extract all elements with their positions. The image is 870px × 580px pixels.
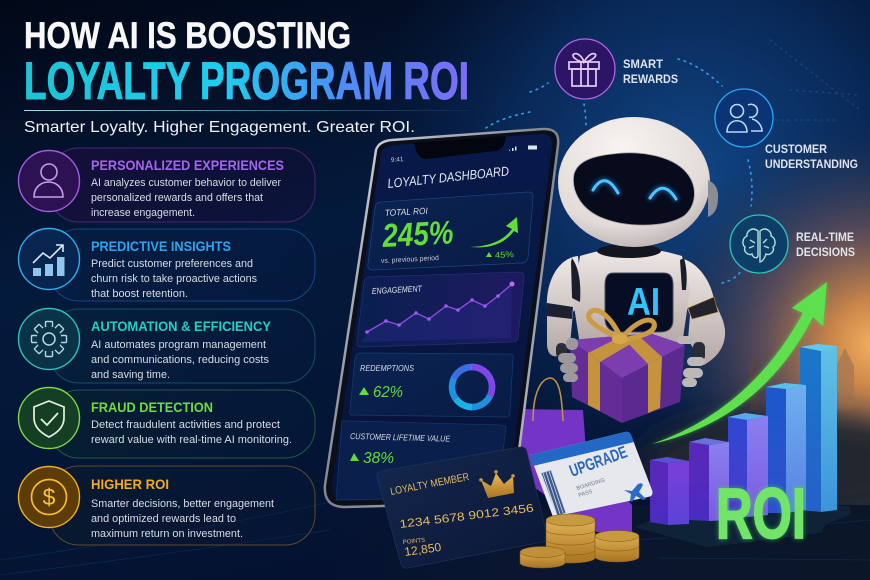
label: real-time decisions: REAL-TIME xyxy=(796,232,854,244)
boarding pass: UPGRADE xyxy=(567,442,630,481)
status icons xyxy=(509,146,537,151)
robot arms xyxy=(547,256,582,356)
label: smart rewards xyxy=(623,59,678,86)
robot hands xyxy=(556,336,705,387)
robot xyxy=(547,117,725,365)
title xyxy=(24,15,469,111)
card: total ROI: TOTAL ROI xyxy=(385,206,429,218)
card: total ROI: 245% xyxy=(381,213,454,254)
bar 1 xyxy=(650,457,689,525)
panel: predictive insights: churn risk to take proactive actions xyxy=(91,273,257,285)
panel: automation and efficiency: and communications, reducing costs xyxy=(91,354,269,366)
bar chart xyxy=(633,344,851,548)
card: redemptions: REDEMPTIONS xyxy=(360,363,414,373)
panel: predictive insights xyxy=(18,228,315,301)
shopping bag xyxy=(497,378,632,532)
subtitle: Smarter Loyalty. Higher Engagement. Greater ROI. xyxy=(24,119,415,136)
title: LOYALTY PROGRAM ROI xyxy=(24,52,469,111)
panel: personalized experiences: increase engagement. xyxy=(91,207,195,219)
icon: person xyxy=(18,150,80,212)
notch xyxy=(414,136,506,159)
bar 5 xyxy=(800,344,837,512)
panel: fraud detection: Detect fraudulent activities and protect xyxy=(91,419,280,431)
card: engagement chart xyxy=(357,272,524,347)
barcode xyxy=(541,470,566,516)
label: smart rewards: REWARDS xyxy=(623,74,678,86)
card: engagement chart: ENGAGEMENT xyxy=(372,283,423,296)
donut chart xyxy=(452,367,492,407)
card: redemptions: 62% xyxy=(373,384,403,401)
label: smart rewards: SMART xyxy=(623,59,663,71)
icon: rising chart xyxy=(18,228,80,290)
label: customer understanding: UNDERSTANDING xyxy=(765,159,858,171)
label: customer understanding: CUSTOMER xyxy=(765,144,828,156)
loyalty card xyxy=(377,447,547,568)
panel: personalized experiences: personalized rewards and offers that xyxy=(91,192,263,204)
bar 2 xyxy=(689,438,729,521)
robot torso xyxy=(573,248,690,345)
boarding pass: PASS xyxy=(578,489,594,499)
panel: automation and efficiency: AUTOMATION & EFFICIENCY xyxy=(91,318,272,334)
robot neck xyxy=(597,244,661,258)
phone xyxy=(325,129,558,507)
icon: customer understanding xyxy=(715,89,773,147)
label: customer understanding xyxy=(765,144,858,171)
ROI letters: ROI xyxy=(716,475,806,554)
icon: dollar coin xyxy=(18,466,80,528)
network dotted links xyxy=(486,40,860,283)
panel: automation and efficiency xyxy=(18,308,315,383)
card: total ROI xyxy=(368,192,533,270)
panel: higher ROI: Smarter decisions, better engagement xyxy=(91,498,274,510)
robot visor xyxy=(573,153,694,225)
icon: real-time decisions brain xyxy=(730,215,788,273)
clock: 9:41 xyxy=(391,156,404,164)
robot chest screen: AI xyxy=(627,281,660,324)
gift box xyxy=(570,310,685,423)
panel: fraud detection xyxy=(18,388,315,458)
boarding pass: BOARDING xyxy=(576,478,606,492)
icon: dollar coin: $ xyxy=(43,484,56,510)
panel: higher ROI: maximum return on investment. xyxy=(91,528,243,540)
panel: personalized experiences xyxy=(18,148,315,222)
loyalty card: 12,850 xyxy=(403,540,442,559)
label: real-time decisions: DECISIONS xyxy=(796,247,855,259)
panel: fraud detection: reward value with real-time AI monitoring. xyxy=(91,434,292,446)
robot ear xyxy=(708,180,718,217)
arrow: growth xyxy=(652,282,827,444)
loyalty card: POINTS xyxy=(403,538,425,546)
panel: higher ROI xyxy=(18,466,315,545)
bar 3 xyxy=(728,413,768,517)
icon: gear xyxy=(18,308,80,370)
card: customer lifetime value: CUSTOMER LIFETIME VALUE xyxy=(350,431,450,444)
icon: plane xyxy=(624,483,646,502)
card: total ROI: vs. previous period xyxy=(381,255,439,265)
panel: automation and efficiency: and saving time. xyxy=(91,369,170,381)
card: customer lifetime value xyxy=(336,421,506,500)
label: real-time decisions xyxy=(796,232,855,259)
card: redemptions xyxy=(350,353,513,417)
panel: higher ROI: and optimized rewards lead to xyxy=(91,513,236,525)
card: customer lifetime value: 38% xyxy=(363,450,394,467)
loyalty card: LOYALTY MEMBER xyxy=(389,471,470,498)
boarding pass xyxy=(530,432,652,517)
robot head xyxy=(558,117,710,247)
panel: predictive insights: PREDICTIVE INSIGHTS xyxy=(91,238,231,254)
panel: predictive insights: Predict customer preferences and xyxy=(91,258,253,270)
gold coins xyxy=(520,514,639,568)
bar 4 xyxy=(766,383,806,513)
icon: smart rewards xyxy=(555,39,615,99)
panel: automation and efficiency: AI automates program management xyxy=(91,339,266,351)
panel: personalized experiences: AI analyzes customer behavior to deliver xyxy=(91,177,281,189)
panel: higher ROI: HIGHER ROI xyxy=(91,476,169,492)
panel: predictive insights: that boost retention. xyxy=(91,288,188,300)
robot eyes xyxy=(593,181,676,199)
bow xyxy=(589,310,654,340)
panel: personalized experiences: PERSONALIZED EXPERIENCES xyxy=(91,157,284,173)
card: total ROI: 45% xyxy=(495,249,515,260)
dashboard heading: LOYALTY DASHBOARD xyxy=(387,163,510,191)
panel: fraud detection: FRAUD DETECTION xyxy=(91,399,213,415)
icon: crown xyxy=(479,470,515,498)
ROI letters: ROI xyxy=(716,475,806,554)
title: HOW AI IS BOOSTING xyxy=(24,15,351,56)
icon: shield xyxy=(18,388,80,448)
ribbon xyxy=(588,337,662,413)
robot chest screen xyxy=(605,273,673,332)
loyalty card: 1234 5678 9012 3456 xyxy=(399,503,534,531)
